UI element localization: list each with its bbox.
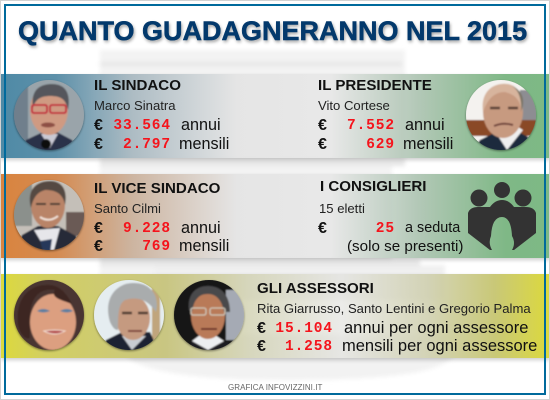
text block: il vice sindaco: € xyxy=(94,220,103,237)
text block: il sindaco: Marco Sinatra xyxy=(94,98,176,113)
text block: il vice sindaco: 769 xyxy=(142,239,171,255)
text block: il presidente: annui xyxy=(405,116,445,134)
text block: il sindaco: mensili xyxy=(179,135,229,153)
text block: il sindaco xyxy=(94,77,229,153)
text block: il vice sindaco: annui xyxy=(181,219,221,237)
text block: il sindaco: € xyxy=(94,136,103,153)
title: QUANTO GUADAGNERANNO NEL 2015 xyxy=(18,16,527,46)
band: assessori xyxy=(1,274,550,358)
text block: il vice sindaco: 9.228 xyxy=(123,221,171,237)
text block: gli assessori: Rita Giarrusso, Santo Lentini e Gregorio Palma xyxy=(257,301,531,316)
text block: il sindaco: annui xyxy=(181,116,221,134)
text block: il presidente: € xyxy=(318,117,327,134)
text block: il presidente: 629 xyxy=(366,137,395,153)
credit: GRAFICA INFOVIZZINI.IT xyxy=(228,383,322,392)
text block: gli assessori: GLI ASSESSORI xyxy=(257,280,374,297)
text block: i consiglieri: 15 eletti xyxy=(319,201,365,216)
text block: i consiglieri: 25 xyxy=(376,221,395,237)
text block: il sindaco: 33.564 xyxy=(113,118,171,134)
portrait: Gregorio Palma xyxy=(172,280,246,352)
text block: i consiglieri: a seduta xyxy=(405,220,460,236)
text block: gli assessori: annui per ogni assessore xyxy=(344,319,528,337)
icon: group of councillors xyxy=(468,182,536,250)
text block: i consiglieri: I CONSIGLIERI xyxy=(320,178,427,195)
band: sindaco and presidente xyxy=(1,74,550,158)
portrait: Marco Sinatra xyxy=(12,80,86,152)
text block: gli assessori: 1.258 xyxy=(285,339,333,355)
text block: il sindaco: IL SINDACO xyxy=(94,77,181,94)
text block: il vice sindaco xyxy=(94,180,229,255)
text block: il presidente: 7.552 xyxy=(347,118,395,134)
text block: i consiglieri xyxy=(318,178,464,255)
text block: il vice sindaco: Santo Cilmi xyxy=(94,201,161,216)
portrait: Rita Giarrusso xyxy=(12,280,86,352)
text block: gli assessori: mensili per ogni assessore xyxy=(342,337,537,355)
text block: gli assessori xyxy=(257,280,537,355)
text block: gli assessori: € xyxy=(257,338,266,355)
text block: il sindaco: 2.797 xyxy=(123,137,171,153)
text block: i consiglieri: (solo se presenti) xyxy=(347,238,464,255)
portrait: Vito Cortese xyxy=(464,80,538,152)
text block: il vice sindaco: IL VICE SINDACO xyxy=(94,180,220,197)
text block: il presidente: mensili xyxy=(403,135,453,153)
text block: il sindaco: € xyxy=(94,117,103,134)
text block: il presidente xyxy=(318,77,453,153)
text block: il vice sindaco: € xyxy=(94,238,103,255)
text block: gli assessori: € xyxy=(257,320,266,337)
portrait: Santo Cilmi xyxy=(12,180,86,252)
text block: i consiglieri: € xyxy=(318,220,327,237)
text block: il vice sindaco: mensili xyxy=(179,237,229,255)
text block: il presidente: IL PRESIDENTE xyxy=(318,77,432,94)
text block: gli assessori: 15.104 xyxy=(275,321,333,337)
portrait: Santo Lentini xyxy=(92,280,166,352)
band: vice sindaco and consiglieri xyxy=(1,174,550,258)
text block: il presidente: € xyxy=(318,136,327,153)
portraits xyxy=(12,80,538,352)
text block: il presidente: Vito Cortese xyxy=(318,98,390,113)
